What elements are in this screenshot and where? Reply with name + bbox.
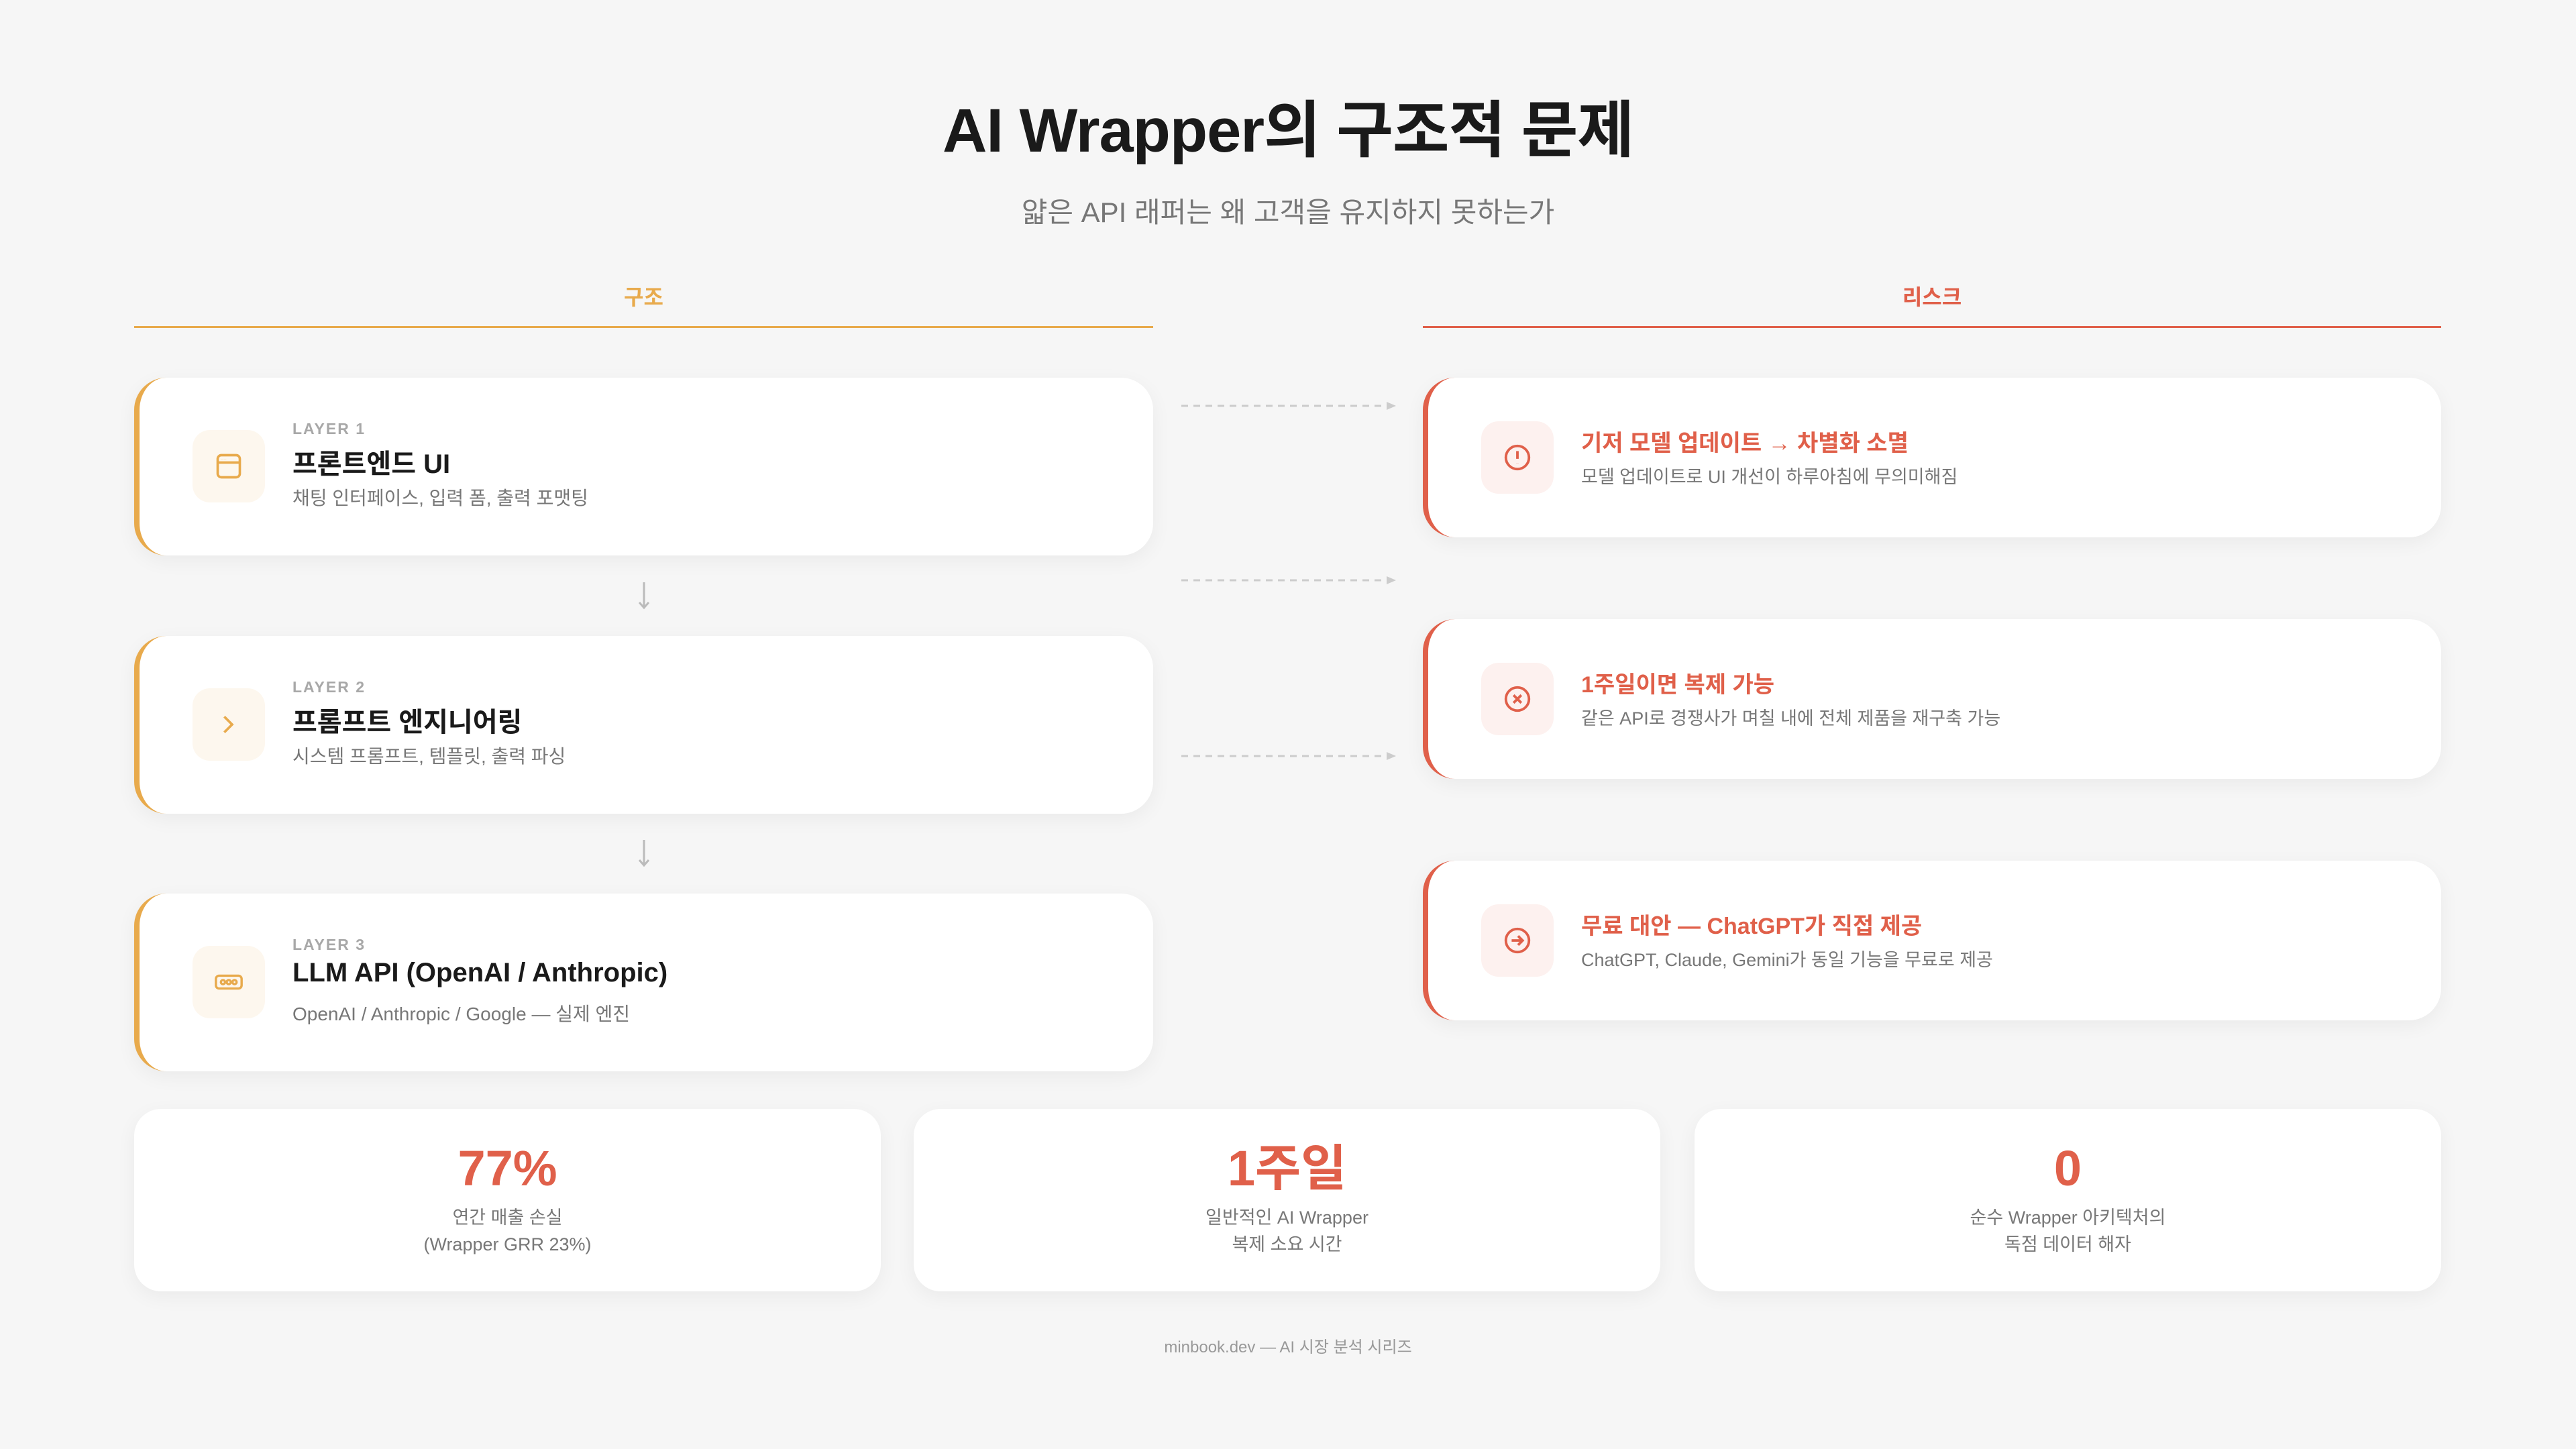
- arrow: dashed 2: [1181, 576, 1395, 584]
- icon: arrow circle: [1481, 904, 1554, 977]
- stat: 1 week: 복제 소요 시간: [1232, 1234, 1342, 1254]
- description: 채팅 인터페이스, 입력 폼, 출력 포맷팅: [292, 488, 588, 508]
- stat: 77%: 77%: [458, 1140, 557, 1196]
- stat: 0: 순수 Wrapper 아키텍처의: [1970, 1208, 2165, 1228]
- label: LAYER 3: [292, 936, 366, 953]
- heading: 1주일이면 복제 가능: [1581, 672, 1774, 698]
- panel: risk 1: [1423, 378, 2441, 537]
- arrow: down 1: [639, 582, 649, 609]
- heading: 프롬프트 엔지니어링: [292, 708, 522, 737]
- stat: 77%: (Wrapper GRR 23%): [423, 1234, 592, 1254]
- section heading: structure: 구조: [624, 285, 663, 309]
- label: LAYER 1: [292, 420, 366, 437]
- panel: layer 1: [134, 378, 1153, 555]
- section heading: risk: [1423, 280, 2441, 328]
- icon: browser window: [193, 430, 265, 502]
- footer: minbook.dev — AI 시장 분석 시리즈: [1164, 1338, 1412, 1356]
- icon: api chip: [193, 946, 265, 1018]
- stat: 0: [1695, 1109, 2441, 1291]
- stat: 1 week: 1주일: [1228, 1140, 1346, 1196]
- icon: x circle: [1481, 663, 1554, 735]
- panel: risk 2: [1423, 619, 2441, 779]
- heading: LLM API (OpenAI / Anthropic): [292, 958, 667, 987]
- panel: layer 3: [134, 894, 1153, 1071]
- stat: 0: 0: [2054, 1140, 2082, 1196]
- title: AI Wrapper의 구조적 문제: [943, 97, 1633, 165]
- panel: risk 3: [1423, 861, 2441, 1020]
- icon: prompt chevron: [193, 688, 265, 761]
- stat: 1 week: [914, 1109, 1660, 1291]
- stat: 77%: [134, 1109, 881, 1291]
- label: LAYER 2: [292, 678, 366, 696]
- arrow: dashed 3: [1181, 752, 1395, 760]
- description: 같은 API로 경쟁사가 며칠 내에 전체 제품을 재구축 가능: [1581, 708, 2000, 729]
- description: ChatGPT, Claude, Gemini가 동일 기능을 무료로 제공: [1581, 950, 1993, 970]
- panel: layer 2: [134, 636, 1153, 814]
- section heading: structure: [134, 280, 1153, 328]
- heading: 기저 모델 업데이트 → 차별화 소멸: [1581, 431, 1909, 456]
- description: 시스템 프롬프트, 템플릿, 출력 파싱: [292, 746, 566, 767]
- stat: 77%: 연간 매출 손실: [452, 1208, 563, 1228]
- description: OpenAI / Anthropic / Google — 실제 엔진: [292, 1004, 630, 1024]
- icon: alert: [1481, 421, 1554, 494]
- subtitle: 얇은 API 래퍼는 왜 고객을 유지하지 못하는가: [1022, 197, 1554, 228]
- heading: 무료 대안 — ChatGPT가 직접 제공: [1581, 914, 1922, 939]
- arrow: dashed 1: [1181, 402, 1395, 410]
- stat: 0: 독점 데이터 해자: [2004, 1234, 2131, 1254]
- description: 모델 업데이트로 UI 개선이 하루아침에 무의미해짐: [1581, 467, 1957, 487]
- stat: 1 week: 일반적인 AI Wrapper: [1205, 1208, 1368, 1228]
- heading: 프론트엔드 UI: [292, 449, 450, 479]
- arrow: down 2: [639, 840, 649, 867]
- section heading: risk: 리스크: [1902, 285, 1962, 309]
